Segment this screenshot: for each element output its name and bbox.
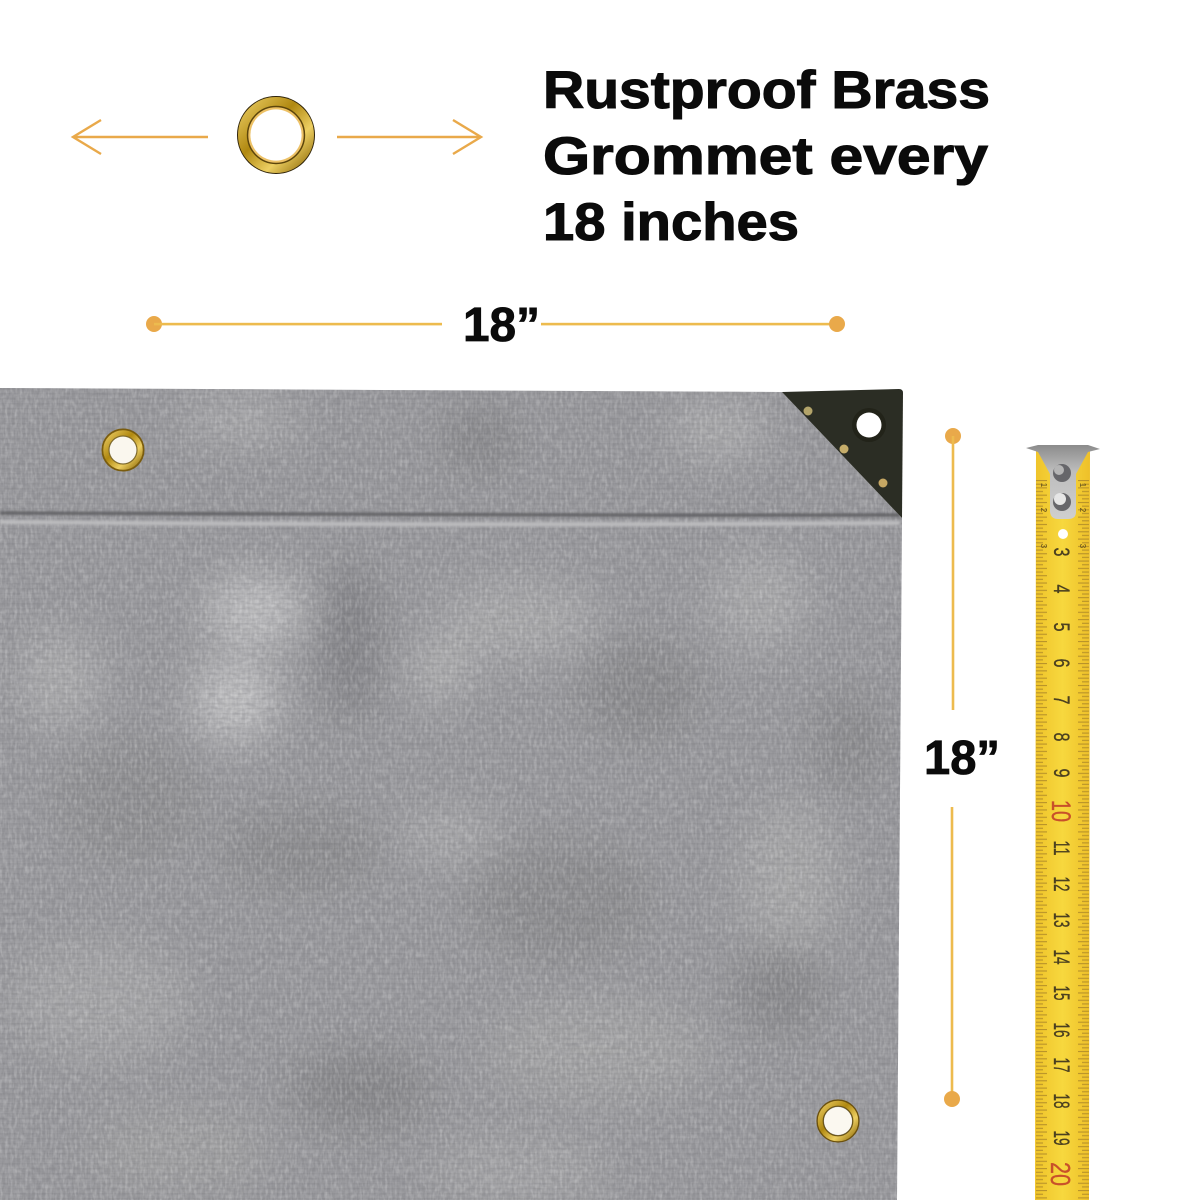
tape numbers: 6 [1049,658,1074,668]
tape small side numbers: 2 [1039,508,1048,513]
icon: brass grommet [237,96,315,174]
tape numbers: 20 [1045,1162,1076,1186]
tape small side numbers: 3 [1078,544,1087,549]
tarp fabric weave [0,380,910,1200]
tape numbers: 16 [1049,1022,1074,1038]
tape small side numbers [1039,483,1087,549]
icon: brass grommet with spacing arrows [73,96,481,174]
tape numbers: 8 [1049,732,1074,742]
tape measure [1026,445,1100,1200]
tarp shading blotches [10,398,885,1200]
tape small side numbers: 2 [1078,508,1087,513]
tape small side numbers: 3 [1039,544,1048,549]
heading: Grommet every [543,127,989,186]
tape numbers: 12 [1049,876,1074,892]
arrow: right [337,120,481,154]
panel: grey tarp [0,380,910,1200]
tape numbers: 13 [1049,912,1074,928]
tape numbers: 15 [1049,986,1074,1000]
tape numbers: 11 [1049,840,1074,856]
icon: corner reinforcement plate [782,389,903,518]
icon: tarp grommet bottom right [818,1100,858,1142]
tape tick marks [1036,480,1089,1200]
tape numbers: 4 [1049,584,1074,594]
tape numbers: 14 [1049,950,1074,964]
arrow: left [73,120,208,154]
tape numbers: 3 [1049,548,1074,556]
horizontal dimension: 18 inches: 18” [463,299,540,352]
tape small side numbers: 1 [1039,483,1048,488]
tape small side numbers: 1 [1078,483,1087,488]
tape numbers: 5 [1049,622,1074,632]
tarp hem seam [0,513,900,524]
tape body [1035,448,1090,1200]
tape numbers: 17 [1049,1058,1074,1072]
tape numbers: 9 [1049,768,1074,778]
heading [543,61,990,252]
horizontal dimension: 18 inches [146,299,845,352]
tape numbers: 18 [1049,1094,1074,1108]
heading: Rustproof Brass [543,61,990,120]
tape numbers [1045,548,1076,1186]
vertical dimension: 18 inches [924,428,1000,1107]
icon: tarp grommet top left [102,430,144,470]
tape numbers: 10 [1046,800,1076,822]
tape numbers: 7 [1049,696,1074,704]
heading: 18 inches [543,193,799,252]
tape metal hook [1026,445,1100,539]
tape numbers: 19 [1049,1130,1074,1146]
vertical dimension: 18 inches: 18” [924,732,1000,785]
